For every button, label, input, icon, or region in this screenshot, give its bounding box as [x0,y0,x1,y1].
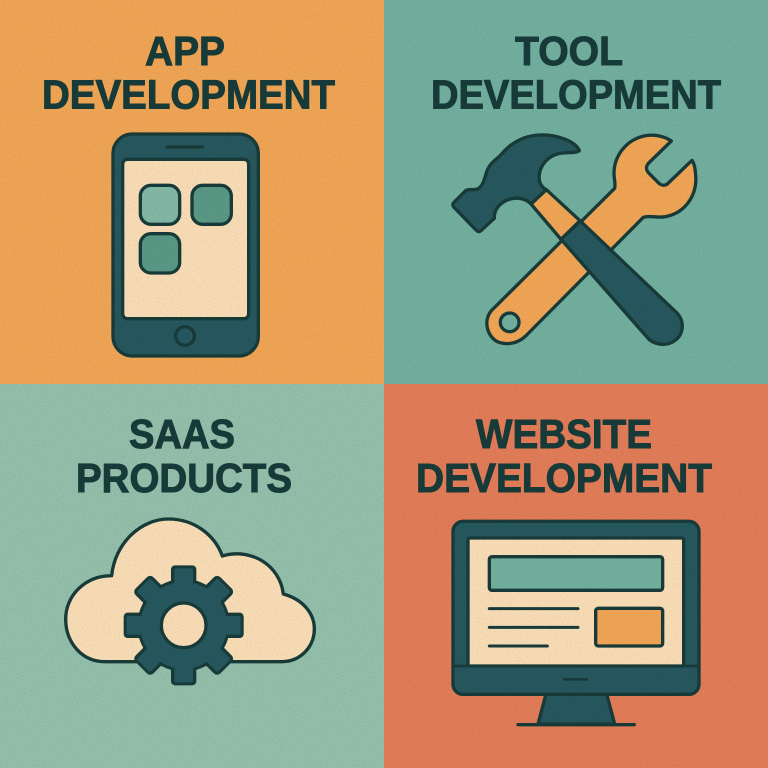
icon: desktop monitor [453,521,699,725]
icon: cloud with gear [66,519,314,684]
cloud [66,519,314,662]
heading: tool development: TOOL [515,28,623,74]
panel: app development [0,0,384,384]
panel: tool development [384,0,768,384]
heading: saas products: PRODUCTS [76,455,292,501]
heading: website development [416,411,712,501]
heading: app development [42,28,335,118]
heading: app development: DEVELOPMENT [42,72,335,118]
icon: crossed hammer and wrench [453,135,696,344]
heading: saas products [76,411,292,501]
heading: app development: APP [145,28,225,74]
heading: website development: WEBSITE [476,411,652,457]
gear [125,567,242,684]
heading: saas products: SAAS [129,411,235,457]
icon: smartphone [113,134,258,356]
panel: website development [384,384,768,768]
heading: website development: DEVELOPMENT [416,455,712,501]
heading: tool development [431,28,721,118]
heading: tool development: DEVELOPMENT [431,72,721,118]
panel: saas products [0,384,384,768]
